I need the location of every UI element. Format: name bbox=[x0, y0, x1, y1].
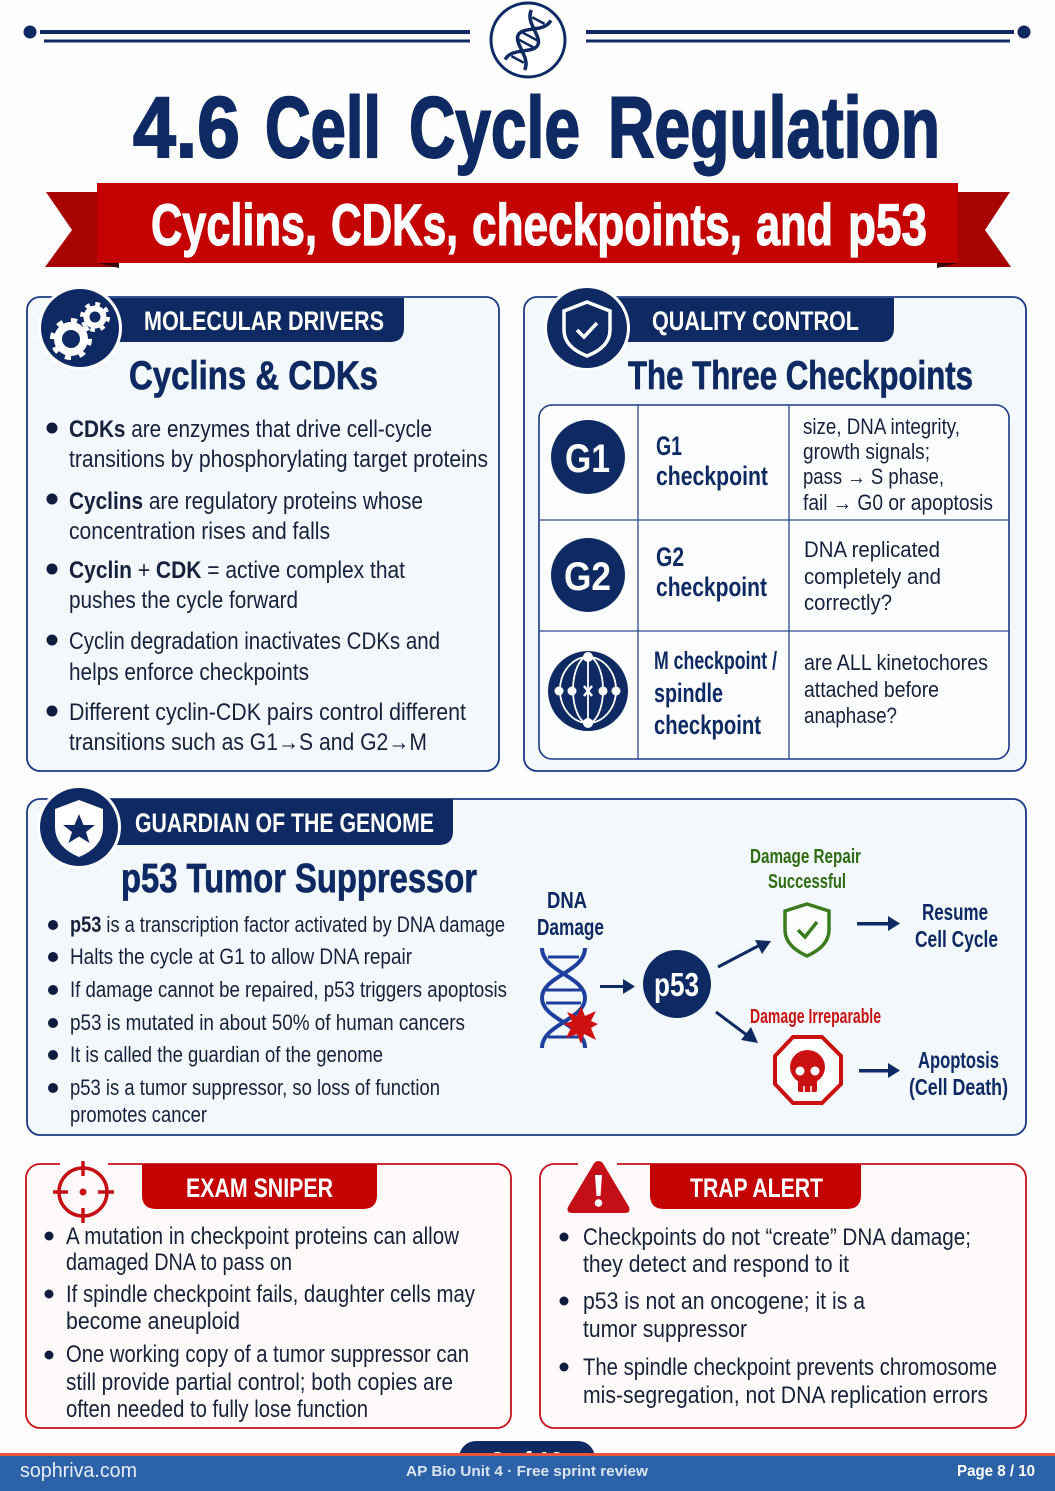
row: M checkpoint: anaphase? bbox=[804, 703, 897, 728]
subtitle ribbon banner: Cyclins, bbox=[151, 193, 317, 258]
bullet list: exam sniper: One working copy of a tumor suppressor can bbox=[66, 1341, 469, 1368]
title: Cycle bbox=[409, 80, 580, 176]
row: G1: G1 bbox=[565, 437, 610, 481]
bullet list: exam sniper: still provide partial control; both copies are bbox=[66, 1369, 453, 1396]
label: apoptosis: Apoptosis bbox=[918, 1047, 999, 1073]
label: damage repair successful: Damage Repair bbox=[750, 846, 861, 868]
bullet list: cyclins and CDKs: Cyclin + CDK = active complex that bbox=[69, 557, 405, 584]
icon: green shield check bbox=[785, 904, 829, 956]
icon: shield check bbox=[544, 285, 630, 371]
panel: guardian of the genome bbox=[27, 785, 1026, 1135]
label: apoptosis: (Cell Death) bbox=[909, 1074, 1008, 1100]
label: damage irreparable: Damage Irreparable bbox=[750, 1006, 881, 1028]
bullet list: p53: promotes cancer bbox=[70, 1102, 207, 1127]
bullet list: p53: p53 is a tumor suppressor, so loss of function bbox=[70, 1075, 440, 1100]
title: Cell bbox=[265, 80, 381, 176]
row: M checkpoint: attached before bbox=[804, 677, 939, 702]
label: DNA damage: DNA bbox=[547, 887, 587, 913]
bullet list: exam sniper: If spindle checkpoint fails, daughter cells may bbox=[66, 1281, 475, 1308]
row: G1: pass → S phase, bbox=[803, 464, 944, 489]
bullet list: cyclins and CDKs: helps enforce checkpoints bbox=[69, 659, 309, 686]
bullet list: exam sniper: A mutation in checkpoint proteins can allow bbox=[66, 1223, 460, 1250]
arrow: p53 to apoptosis bbox=[716, 1012, 758, 1043]
row: G2 bbox=[551, 537, 941, 615]
row: M checkpoint: M checkpoint / bbox=[654, 647, 777, 675]
footer bar: Page 8 / 10 bbox=[957, 1463, 1035, 1480]
checkpoints table bbox=[539, 405, 1009, 759]
bullet list: cyclins and CDKs: transitions such as G1→S and G2→M bbox=[69, 729, 427, 756]
bullet list: trap alert: mis-segregation, not DNA replication errors bbox=[583, 1382, 988, 1409]
bullet list: trap alert bbox=[560, 1224, 997, 1409]
panel: molecular drivers bbox=[27, 286, 499, 771]
bullet list: exam sniper: become aneuploid bbox=[66, 1308, 240, 1335]
label: DNA damage: Damage bbox=[537, 914, 604, 940]
subtitle ribbon banner: and bbox=[756, 193, 833, 258]
bullet list: cyclins and CDKs: CDKs are enzymes that drive cell-cycle bbox=[69, 416, 432, 443]
bullet list: p53 bbox=[48, 912, 507, 1127]
bullet list: p53: p53 is a transcription factor activated by DNA damage bbox=[70, 912, 505, 937]
bullet list: trap alert: tumor suppressor bbox=[583, 1316, 747, 1343]
row: G2: completely and bbox=[804, 564, 941, 589]
arrow: p53 to repair bbox=[718, 940, 771, 967]
tab: trap alert bbox=[650, 1164, 861, 1209]
row: G1: size, DNA integrity, bbox=[803, 414, 960, 439]
tab: trap alert: TRAP ALERT bbox=[690, 1173, 823, 1203]
row: M checkpoint: checkpoint bbox=[654, 710, 761, 740]
row: G1: checkpoint bbox=[656, 461, 768, 491]
footer bar: sophriva.com bbox=[20, 1460, 137, 1482]
icon: warning triangle bbox=[568, 1161, 630, 1213]
footer bar: AP Bio Unit 4 · Free sprint review bbox=[406, 1463, 648, 1480]
subtitle ribbon banner: checkpoints, bbox=[472, 193, 742, 258]
bullet list: cyclins and CDKs: concentration rises and falls bbox=[69, 518, 330, 545]
clipped page pill bbox=[459, 1441, 595, 1475]
bullet list: cyclins and CDKs: Cyclins are regulatory proteins whose bbox=[69, 488, 423, 515]
arrow: damage to p53 bbox=[600, 979, 635, 994]
row: G2: G2 bbox=[564, 555, 611, 599]
row: G2: DNA replicated bbox=[804, 537, 940, 562]
tab: quality control: QUALITY CONTROL bbox=[652, 306, 859, 336]
icon: gears bbox=[38, 286, 122, 370]
arrow: repair to resume bbox=[857, 916, 900, 931]
clipped page pill: 8 of 10 bbox=[491, 1449, 563, 1471]
tab: guardian of the genome bbox=[100, 799, 453, 845]
subtitle ribbon banner: p53 bbox=[848, 193, 927, 258]
bullet list: trap alert: they detect and respond to it bbox=[583, 1251, 849, 1278]
heading: cyclins and CDKs: Cyclins & CDKs bbox=[129, 354, 378, 398]
bullet list: cyclins and CDKs: Cyclin degradation inactivates CDKs and bbox=[69, 628, 440, 655]
bullet list: trap alert: Checkpoints do not “create” DNA damage; bbox=[583, 1224, 971, 1251]
row: G1: growth signals; bbox=[803, 439, 930, 464]
row: G2: G2 bbox=[656, 542, 684, 572]
label: resume cell cycle: Cell Cycle bbox=[915, 926, 998, 952]
row: G2: correctly? bbox=[804, 590, 892, 615]
icon: damaged DNA helix bbox=[542, 948, 598, 1048]
row: M checkpoint: are ALL kinetochores bbox=[804, 650, 988, 675]
label: damage repair successful: Successful bbox=[768, 871, 846, 893]
label: DNA damage bbox=[537, 887, 604, 940]
row: G1: fail → G0 or apoptosis bbox=[803, 490, 993, 515]
bullet list: p53: p53 is mutated in about 50% of human cancers bbox=[70, 1010, 465, 1035]
bullet list: p53: It is called the guardian of the genome bbox=[70, 1042, 383, 1067]
bullet list: exam sniper bbox=[44, 1223, 475, 1423]
subtitle ribbon banner: CDKs, bbox=[331, 193, 458, 258]
subtitle ribbon banner bbox=[45, 183, 1011, 268]
tab: quality control bbox=[610, 298, 894, 342]
node: p53 bbox=[643, 950, 711, 1018]
arrow: irreparable to apoptosis bbox=[859, 1063, 900, 1078]
panel: trap alert bbox=[540, 1160, 1026, 1428]
icon: target crosshair bbox=[53, 1161, 114, 1223]
bullet list: cyclins and CDKs bbox=[46, 416, 488, 756]
label: resume cell cycle bbox=[915, 899, 998, 952]
bullet list: cyclins and CDKs: pushes the cycle forward bbox=[69, 587, 298, 614]
tab: exam sniper bbox=[142, 1164, 377, 1209]
bullet list: p53: If damage cannot be repaired, p53 triggers apoptosis bbox=[70, 977, 507, 1002]
icon: shield star bbox=[37, 785, 121, 869]
heading: p53 tumor suppressor: p53 Tumor Suppressor bbox=[121, 855, 477, 901]
bullet list: cyclins and CDKs: Different cyclin-CDK pairs control different bbox=[69, 699, 466, 726]
header ornament with DNA icon bbox=[24, 3, 1030, 77]
panel: quality control bbox=[524, 285, 1026, 771]
label: damage repair successful bbox=[750, 846, 861, 893]
title bbox=[133, 80, 940, 176]
title: Regulation bbox=[608, 80, 940, 176]
tab: molecular drivers bbox=[105, 298, 404, 342]
icon: skull stop sign bbox=[775, 1037, 841, 1103]
row: G1 bbox=[551, 414, 993, 515]
label: apoptosis bbox=[909, 1047, 1008, 1100]
tab: molecular drivers: MOLECULAR DRIVERS bbox=[144, 306, 384, 336]
bullet list: cyclins and CDKs: transitions by phosphorylating target proteins bbox=[69, 446, 488, 473]
title: 4.6 bbox=[133, 80, 240, 176]
row: M checkpoint bbox=[548, 647, 988, 740]
bullet list: exam sniper: damaged DNA to pass on bbox=[66, 1249, 292, 1276]
row: G1: G1 bbox=[656, 431, 682, 461]
footer bar bbox=[0, 1453, 1055, 1491]
label: resume cell cycle: Resume bbox=[922, 899, 988, 925]
row: G2: checkpoint bbox=[656, 572, 767, 602]
bullet list: p53: Halts the cycle at G1 to allow DNA repair bbox=[70, 944, 412, 969]
panel: exam sniper bbox=[26, 1160, 511, 1428]
row: M checkpoint: spindle bbox=[654, 678, 723, 708]
bullet list: exam sniper: often needed to fully lose function bbox=[66, 1396, 368, 1423]
bullet list: trap alert: p53 is not an oncogene; it is a bbox=[583, 1288, 866, 1315]
node: p53: p53 bbox=[654, 966, 699, 1003]
tab: guardian of the genome: GUARDIAN OF THE GENOME bbox=[135, 808, 434, 838]
tab: exam sniper: EXAM SNIPER bbox=[186, 1173, 333, 1203]
